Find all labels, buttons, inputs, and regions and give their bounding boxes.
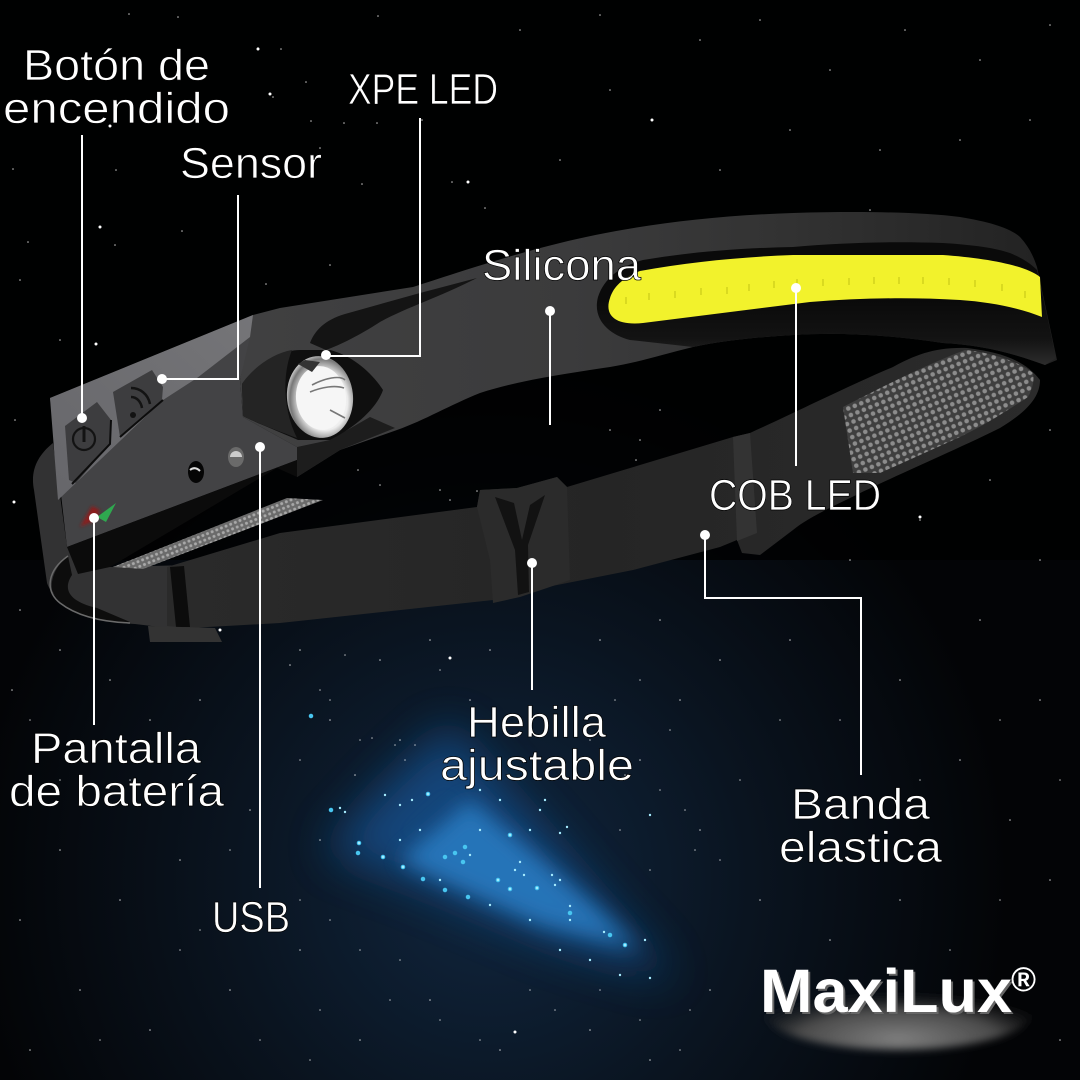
label: power button: encendido bbox=[3, 84, 230, 133]
label: battery display bbox=[9, 724, 225, 816]
leader: XPE LED bbox=[326, 118, 420, 356]
rear strap curl at left bbox=[33, 443, 190, 630]
mesh grip pad bbox=[843, 350, 1033, 473]
brand logo: MaxiLux: MaxiLux bbox=[760, 957, 1012, 1025]
main silicone band bbox=[240, 212, 1057, 477]
label: USB: USB bbox=[212, 893, 290, 942]
label: adjustable buckle: Hebilla bbox=[467, 698, 607, 747]
leader: COB LED bbox=[795, 288, 797, 466]
adjustable buckle bbox=[477, 477, 570, 603]
label: elastic band bbox=[779, 780, 943, 872]
label: COB LED: COB LED bbox=[709, 471, 881, 520]
brand logo: MaxiLux: MaxiLux bbox=[762, 959, 1014, 1027]
dark swoop above lamp bbox=[310, 278, 477, 350]
light top strip on housing bbox=[50, 315, 253, 500]
label: elastic band: Banda bbox=[791, 780, 931, 829]
elastic strap bbox=[167, 348, 1040, 628]
leader: sensor bbox=[162, 195, 238, 379]
brand logo: MaxiLux: ® bbox=[1011, 961, 1036, 999]
label: adjustable buckle bbox=[440, 698, 634, 790]
leader: elastic band bbox=[705, 535, 861, 775]
label: XPE LED: XPE LED bbox=[348, 65, 498, 114]
leader: power button bbox=[81, 135, 83, 418]
yellow COB LED strip bbox=[608, 255, 1042, 323]
XPE LED lamp bbox=[242, 350, 383, 441]
label: elastic band: elastica bbox=[779, 823, 943, 872]
label: power button bbox=[3, 41, 230, 133]
battery indicator lights bbox=[80, 503, 116, 527]
label: battery display: de batería bbox=[9, 767, 225, 816]
leader: buckle bbox=[531, 563, 533, 690]
leader: battery display bbox=[93, 518, 95, 725]
label: power button: Botón de bbox=[23, 41, 210, 90]
indicator holes bbox=[188, 447, 244, 483]
headlamp illustration bbox=[33, 212, 1057, 642]
power button bbox=[65, 402, 111, 484]
label: adjustable buckle: ajustable bbox=[440, 741, 634, 790]
callout dots bbox=[77, 283, 801, 568]
dark underside below lamp bbox=[297, 417, 395, 477]
label: silicone: Silicona bbox=[482, 241, 642, 290]
leader: USB bbox=[259, 447, 261, 888]
dark recess around yellow strip bbox=[597, 242, 1056, 365]
housing front face bbox=[50, 315, 297, 547]
housing underside bbox=[67, 460, 297, 574]
leader: silicone bbox=[549, 311, 551, 425]
callout lines and dots bbox=[77, 118, 861, 888]
label: sensor: Sensor bbox=[180, 139, 322, 188]
sensor button bbox=[113, 370, 163, 437]
label: battery display: Pantalla bbox=[31, 724, 202, 773]
strap keeper and clip bbox=[148, 433, 757, 642]
reflective strip bbox=[113, 498, 323, 569]
brand logo: MaxiLux bbox=[760, 957, 1036, 1050]
